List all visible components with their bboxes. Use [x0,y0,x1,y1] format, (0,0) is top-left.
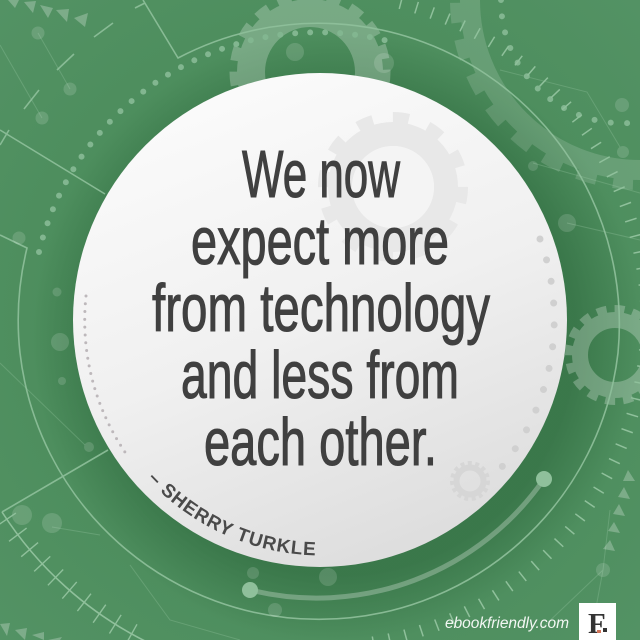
tick scale lower left [2,512,147,640]
quote: from technology [152,271,490,346]
white disc [73,73,567,567]
bottom arc with end nodes [242,471,552,598]
site name: ebookfriendly.com [445,615,569,632]
top gear behind disc [234,0,386,148]
attribution: – SHERRY TURKLE [150,475,315,556]
quote: expect more [191,204,449,279]
quote [152,137,490,480]
big gear top right [456,0,640,184]
dotted ring upper left [39,32,392,252]
triangles bottom left [0,623,62,640]
logo [579,603,616,640]
dotted arc in big gear [501,0,640,123]
tick scale right [370,3,640,640]
gear on disc [324,118,462,256]
triangles top left [8,0,88,27]
right gear [569,309,640,401]
dotted arc left on disc [85,296,127,455]
small gear on disc [452,463,488,499]
logo: F [588,608,606,640]
triangles right [603,470,635,551]
quote: each other. [204,405,437,480]
dotted arc right on disc [501,239,554,468]
quote: We now [242,137,400,212]
quote: and less from [181,338,459,413]
